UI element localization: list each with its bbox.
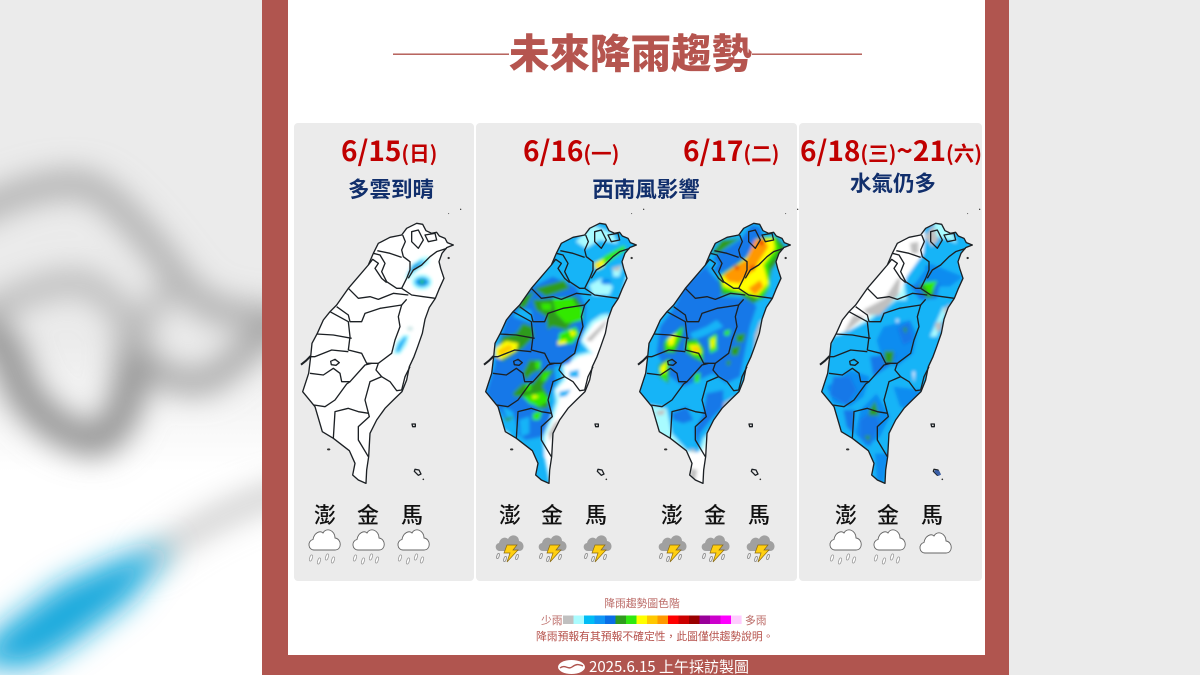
islands weather 6/16: 金 (541, 498, 563, 530)
map: Taiwan 6/15 (301, 209, 461, 483)
legend: rain color scale: 多雨 (745, 612, 767, 628)
islands weather: Penghu Kinmen Matsu: 馬 (401, 498, 423, 530)
red frame left (262, 0, 288, 675)
islands weather 6/18-21: 澎 (835, 498, 857, 530)
islands weather 6/18-21 (830, 498, 951, 564)
subtitle: 水氣仍多 (850, 167, 936, 198)
map: Taiwan 6/16 (483, 208, 644, 484)
blurred photo background, left side (0, 156, 262, 675)
panel: 6/15 (294, 123, 474, 581)
red footer bar (262, 655, 1009, 675)
islands weather 6/17: 馬 (748, 498, 770, 530)
islands weather 6/18-21: 馬 (921, 498, 943, 530)
islands weather: Penghu Kinmen Matsu (309, 498, 429, 564)
subtitle: 多雲到晴 (348, 173, 434, 204)
islands weather 6/17: 澎 (661, 498, 683, 530)
map: Taiwan 6/18-21 (819, 208, 980, 484)
islands weather: Penghu Kinmen Matsu: 澎 (314, 498, 336, 530)
legend: rain color scale: 降雨趨勢圖色階 (604, 595, 680, 611)
islands weather 6/17 (659, 498, 774, 562)
title with side rules: 未來降雨趨勢 (509, 21, 752, 80)
date heading 6/15: 6/15(日) (341, 130, 437, 170)
date heading 6/17: 6/17(二) (683, 130, 779, 170)
subtitle: 西南風影響 (592, 173, 700, 204)
islands weather 6/17: 金 (704, 498, 726, 530)
islands weather: Penghu Kinmen Matsu: 金 (357, 498, 379, 530)
islands weather 6/16: 馬 (585, 498, 607, 530)
panel: 6/18 to 6/21 (799, 123, 983, 581)
legend: rain color scale: 少雨 (541, 612, 563, 628)
islands weather 6/16 (496, 498, 612, 562)
white poster background (288, 0, 985, 655)
date heading 6/16: 6/16(一) (523, 130, 619, 170)
legend: rain color scale: 降雨預報有其預報不確定性，此圖僅供趨勢說明。 (536, 628, 774, 644)
islands weather 6/16: 澎 (499, 498, 521, 530)
panel: 6/16 and 6/17 (469, 123, 813, 581)
map: Taiwan 6/17 (637, 208, 798, 484)
islands weather 6/18-21: 金 (877, 498, 899, 530)
red frame right (985, 0, 1009, 675)
legend: rain color scale (536, 595, 774, 644)
date heading 6/18-21: 6/18(三)~21(六) (800, 130, 982, 170)
